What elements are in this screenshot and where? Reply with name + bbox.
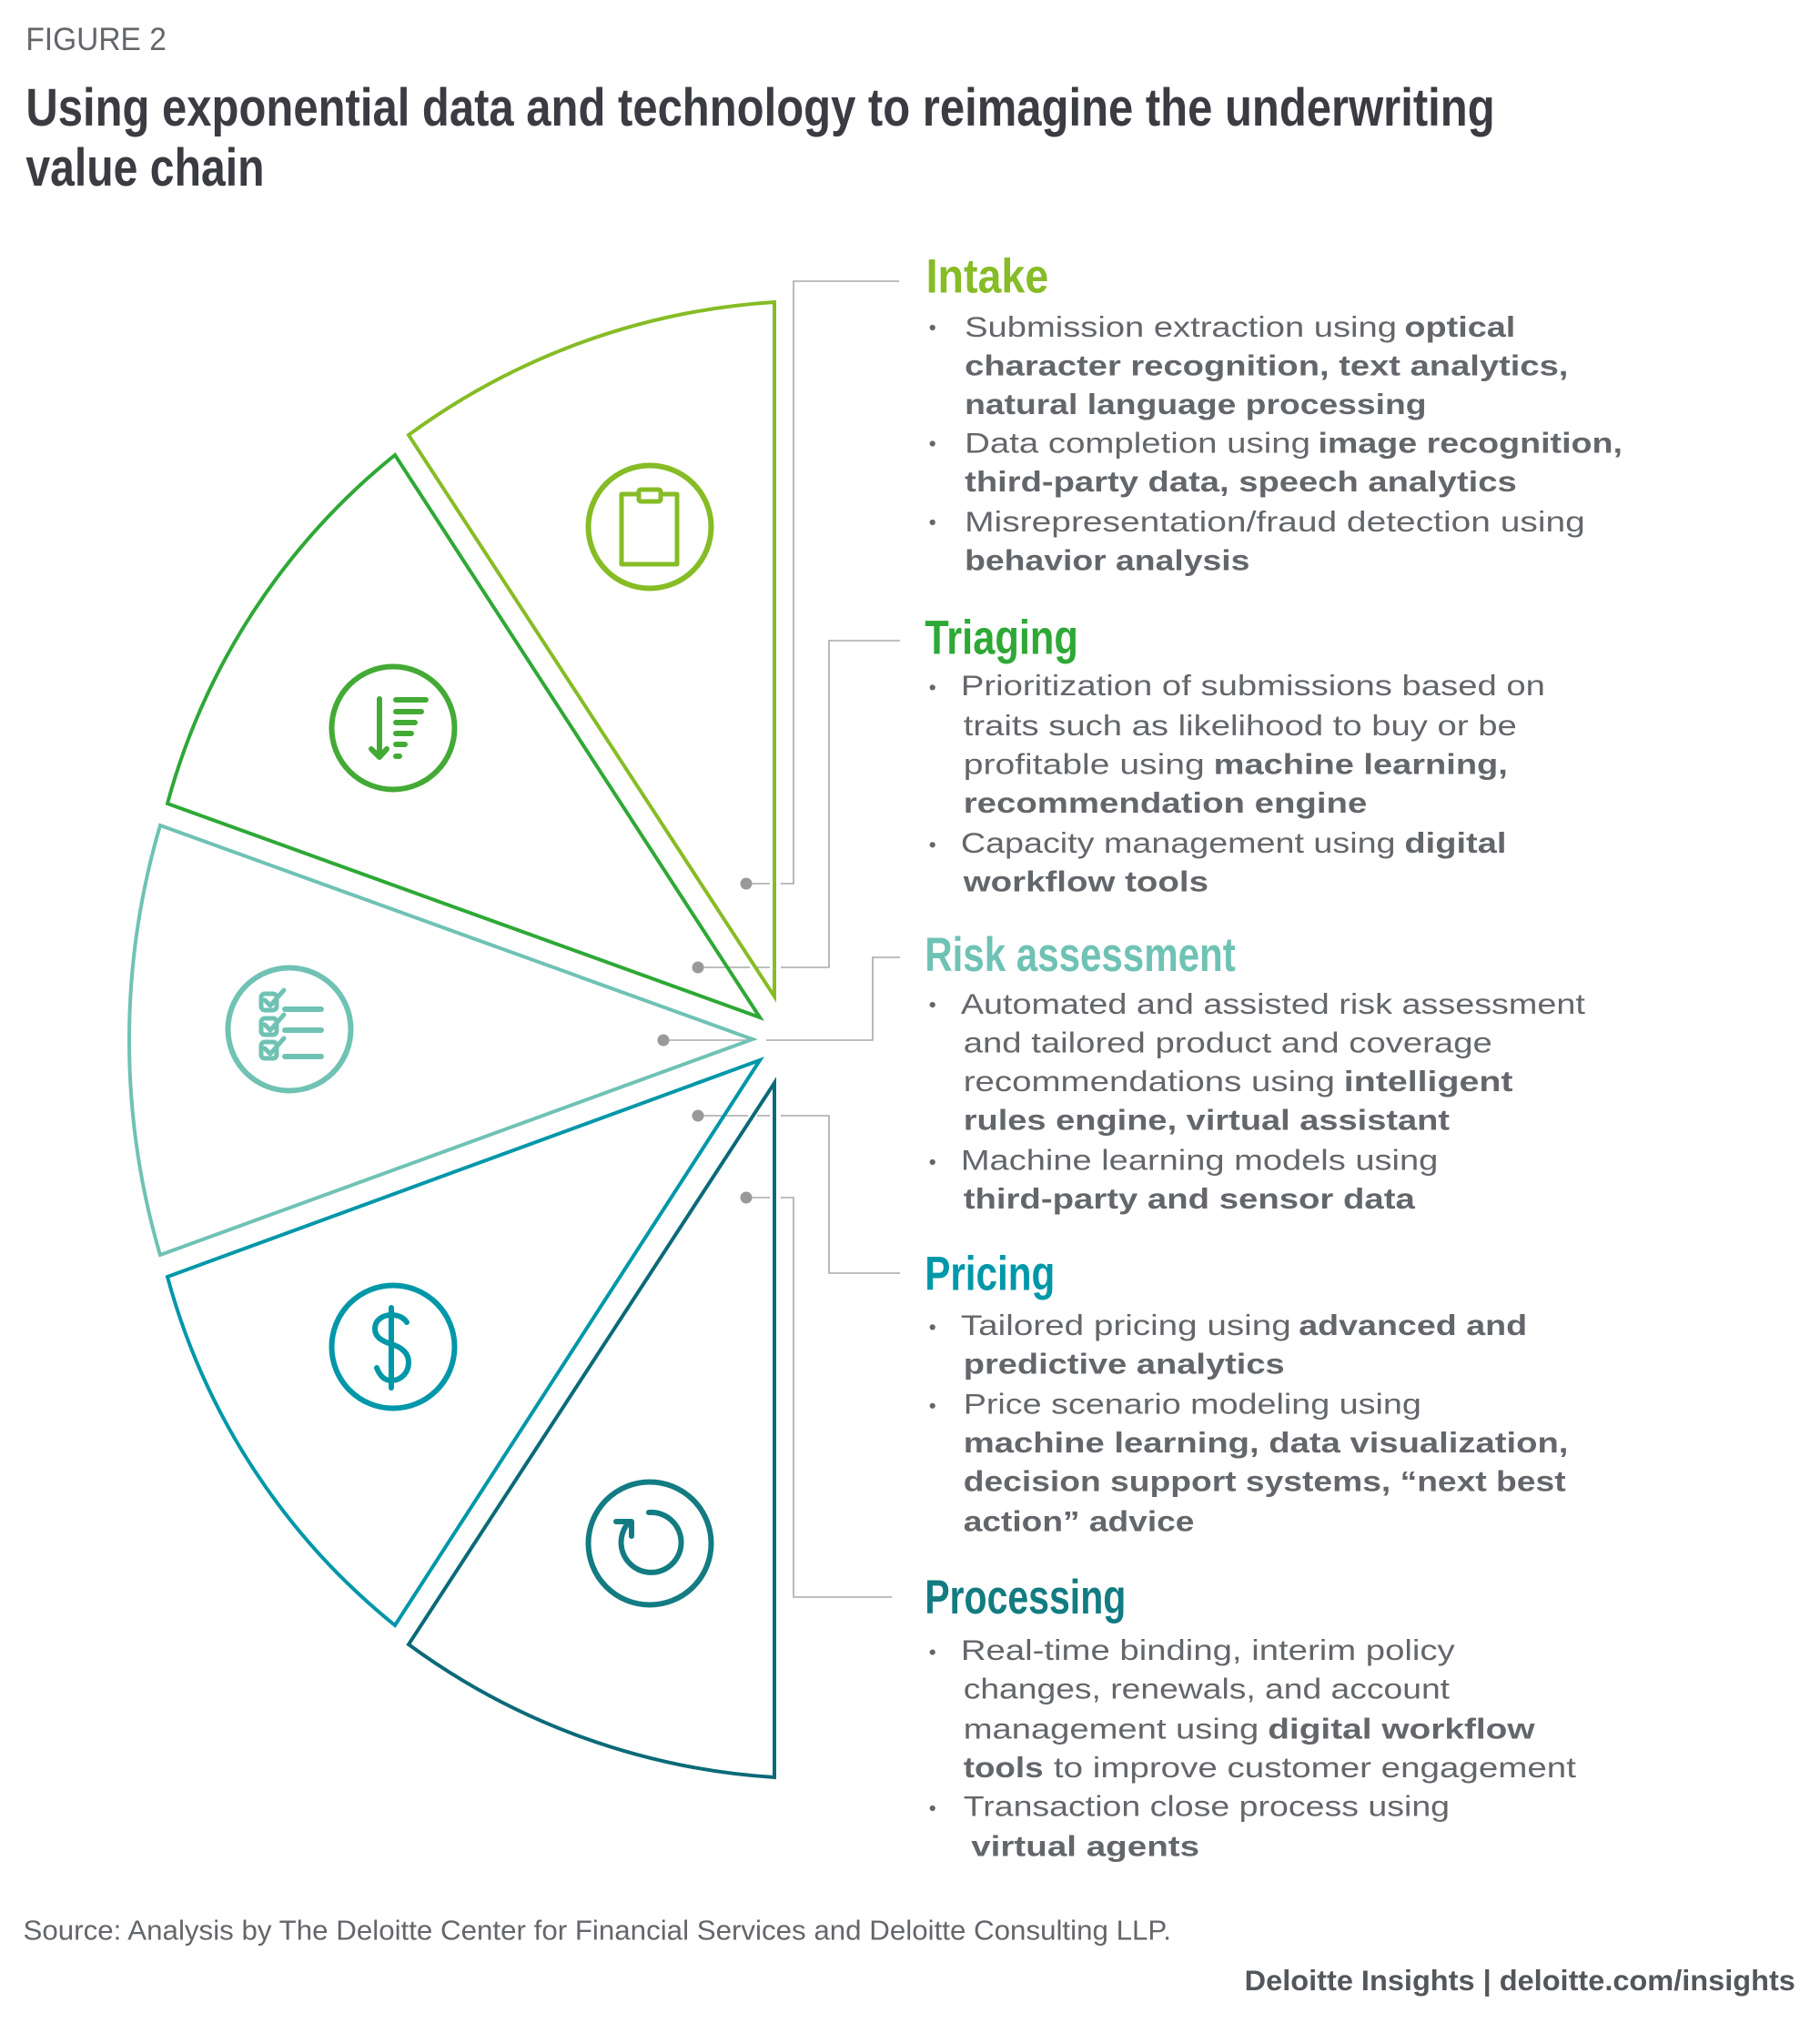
heading: intake: Intake [926,251,1048,304]
leader line: processing [741,1192,892,1597]
text block: intake bullets: Data completion using [965,426,1310,459]
text block: intake bullets: Misrepresentation/fraud detection using [965,505,1585,538]
text block: processing bullets: Real-time binding, interim policy [961,1634,1455,1666]
text block: intake bullets: natural language processing [965,389,1427,420]
text block: processing bullets: tools [964,1752,1044,1784]
text block: processing bullets: changes, renewals, and account [964,1673,1450,1705]
text block: processing bullets: digital workflow [1268,1714,1536,1745]
title [25,78,1495,197]
source note: Source: Analysis by The Deloitte Center for Financial Services and Deloitte Consulting LLP. [24,1916,1171,1947]
text block: triaging bullets: recommendation engine [964,787,1367,819]
text block: risk assessment bullets: third-party and sensor data [964,1183,1416,1215]
text block: intake bullets: image recognition, [1318,427,1623,459]
leader line: triaging [692,641,900,974]
text block: pricing bullets: Tailored pricing using [961,1309,1291,1341]
text block: triaging bullets: traits such as likelihood to buy or be [964,709,1517,742]
icon: sorted list with arrow [331,666,455,790]
title: value chain [25,138,265,197]
leader line: pricing [692,1110,900,1273]
text block: pricing bullets: decision support systems, “next best [964,1465,1566,1497]
wedge: pricing [167,1060,760,1625]
text block: pricing bullets: action” advice [964,1505,1194,1537]
heading: risk assessment: Risk assessment [925,929,1236,982]
text block: processing bullets: virtual agents [971,1830,1199,1862]
text block: triaging bullets: workflow tools [962,865,1208,897]
text block: triaging bullets: profitable using [964,747,1205,780]
text block: risk assessment bullets: recommendations using [964,1065,1335,1097]
text block: risk assessment bullets: and tailored product and coverage [964,1027,1492,1059]
text block: risk assessment bullets: Automated and assisted risk assessment [961,987,1585,1020]
panel: intake [926,251,1623,576]
leader line: risk assessment [657,957,900,1047]
text block: triaging bullets: digital [1404,827,1506,859]
text block: processing bullets [930,1634,1576,1862]
text block: triaging bullets: Capacity management using [961,826,1396,859]
wedge: risk assessment [129,825,753,1255]
text block: pricing bullets: advanced and [1299,1310,1527,1341]
text block: risk assessment bullets: Machine learning models using [961,1143,1438,1176]
heading: pricing: Pricing [925,1248,1055,1300]
text block: processing bullets: to improve customer engagement [1054,1751,1576,1784]
text block: processing bullets: management using [964,1713,1259,1745]
icon: checklist [228,968,351,1090]
panel: triaging [925,612,1545,897]
figure label: FIGURE 2 [25,21,167,57]
icon: dollar sign [331,1285,455,1409]
text block: risk assessment bullets: rules engine, virtual assistant [964,1105,1450,1137]
text block: intake bullets: third-party data, speech analytics [965,466,1517,498]
title: Using exponential data and technology to reimagine the underwriting [25,78,1495,137]
text block: triaging bullets [930,669,1545,897]
icon: clipboard [588,466,712,588]
panel: pricing [925,1248,1568,1537]
text block: pricing bullets: Price scenario modeling using [964,1387,1421,1420]
text block: intake bullets [930,310,1623,576]
text block: processing bullets: Transaction close process using [964,1790,1450,1823]
text block: intake bullets: optical [1404,311,1515,343]
wedge: processing [409,1083,774,1777]
text block: intake bullets: Submission extraction using [965,310,1397,343]
text block: intake bullets: character recognition, text analytics, [965,349,1568,381]
text block: pricing bullets: machine learning, data visualization, [964,1427,1568,1459]
heading: triaging: Triaging [925,612,1078,665]
credit line: Deloitte Insights | deloitte.com/insights [1245,1965,1795,1997]
text block: risk assessment bullets [930,987,1585,1215]
heading: processing: Processing [925,1572,1126,1624]
panel: risk assessment [925,929,1585,1215]
leader line: intake [741,281,899,890]
wedge: triaging [167,455,760,1017]
text block: pricing bullets [930,1309,1568,1537]
text block: pricing bullets: predictive analytics [964,1348,1285,1380]
text block: intake bullets: behavior analysis [965,544,1249,576]
icon: circular arrow [588,1482,712,1605]
text block: risk assessment bullets: intelligent [1344,1066,1512,1097]
text block: triaging bullets: Prioritization of submissions based on [961,669,1545,702]
wedge: intake [409,302,774,996]
panel: processing [925,1572,1576,1862]
text block: triaging bullets: machine learning, [1214,748,1508,780]
